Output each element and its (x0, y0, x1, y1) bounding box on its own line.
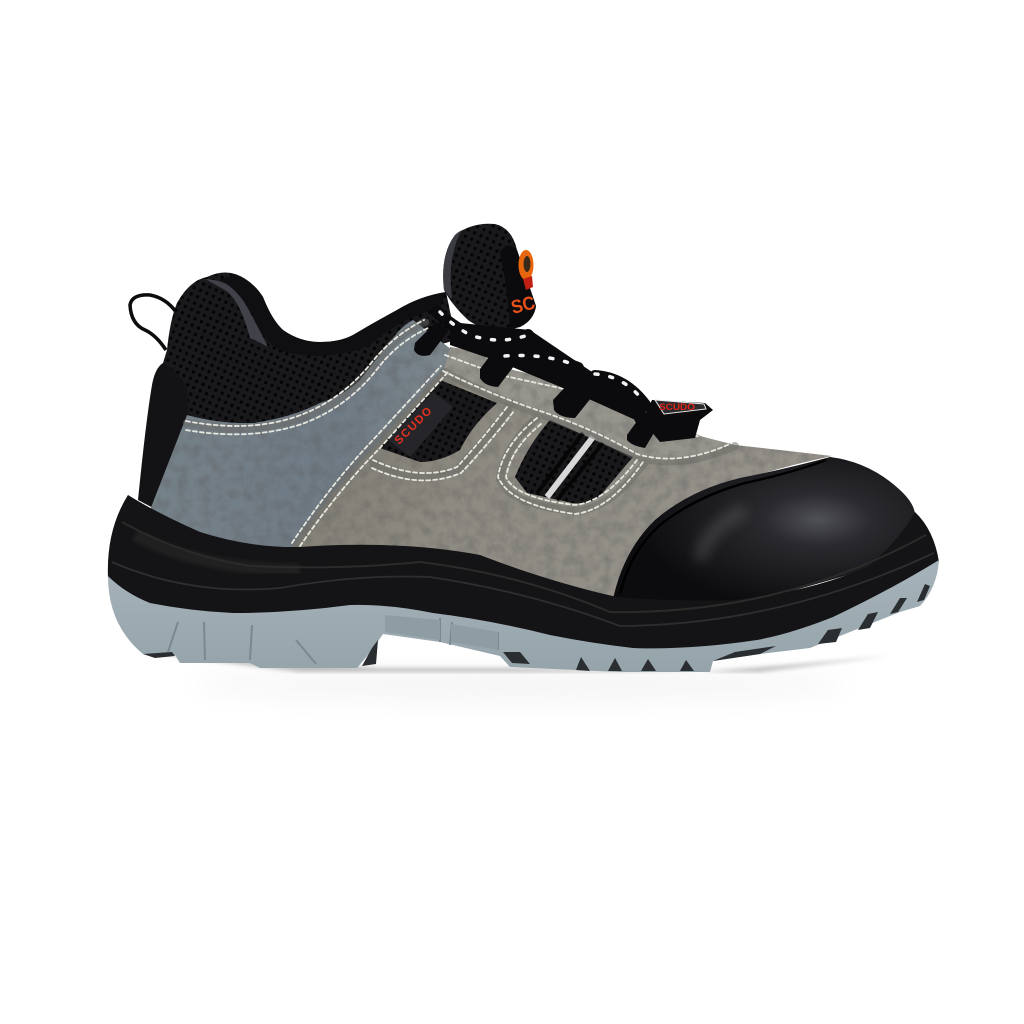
midsole (108, 495, 939, 650)
tongue (443, 224, 538, 330)
heel counter (138, 363, 188, 510)
taupe vamp panel (292, 370, 832, 600)
eyestay (443, 347, 735, 463)
grey outsole (108, 560, 939, 672)
tread lugs and gaps (143, 584, 930, 671)
toe cap (612, 457, 915, 606)
collar mesh lining (163, 273, 456, 432)
ground shadow (140, 652, 890, 701)
mesh window: logo side (380, 380, 497, 462)
stitching (186, 320, 735, 546)
blue-grey quarter panel (150, 320, 452, 550)
lace tag with logo: SCUDO (659, 402, 695, 412)
eyelets (414, 322, 658, 448)
mesh window: reflective stripe (515, 420, 633, 503)
scudo badge: SCUDO (393, 404, 435, 447)
laces (437, 312, 690, 425)
lace tag with logo (642, 400, 713, 442)
tongue logo: SC (509, 293, 538, 319)
pull loop (130, 295, 176, 350)
